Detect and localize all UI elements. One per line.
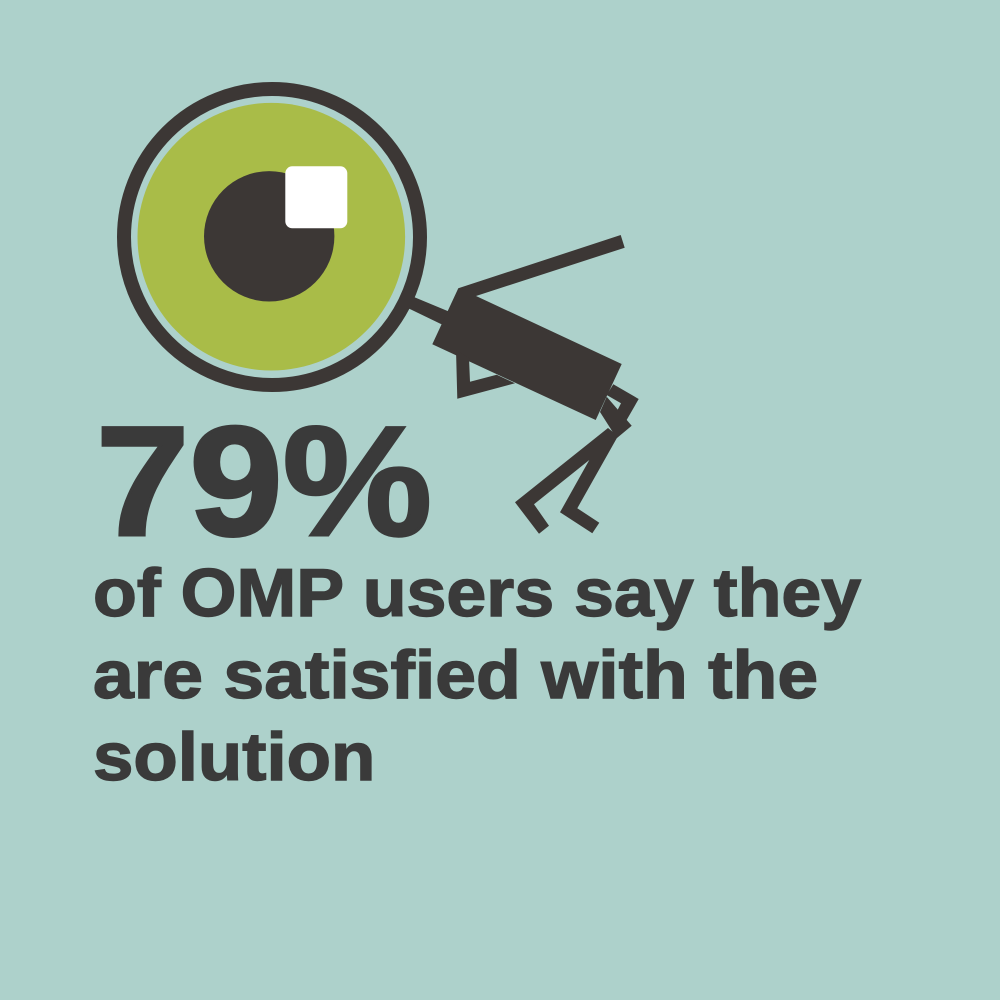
icon: magnifying glass handle body and upper arm <box>432 235 625 420</box>
icon: magnifying glass lens <box>124 89 420 385</box>
statement text: solution <box>93 719 375 795</box>
icon: figure lower arm <box>456 350 515 399</box>
statement text: are satisfied with the <box>93 637 818 713</box>
statement text <box>93 555 862 795</box>
statement text: of OMP users say they <box>93 555 861 631</box>
icon: figure legs <box>515 384 639 534</box>
big number: 79% <box>96 395 432 569</box>
icon: magnifying glass handle neck <box>408 297 450 325</box>
